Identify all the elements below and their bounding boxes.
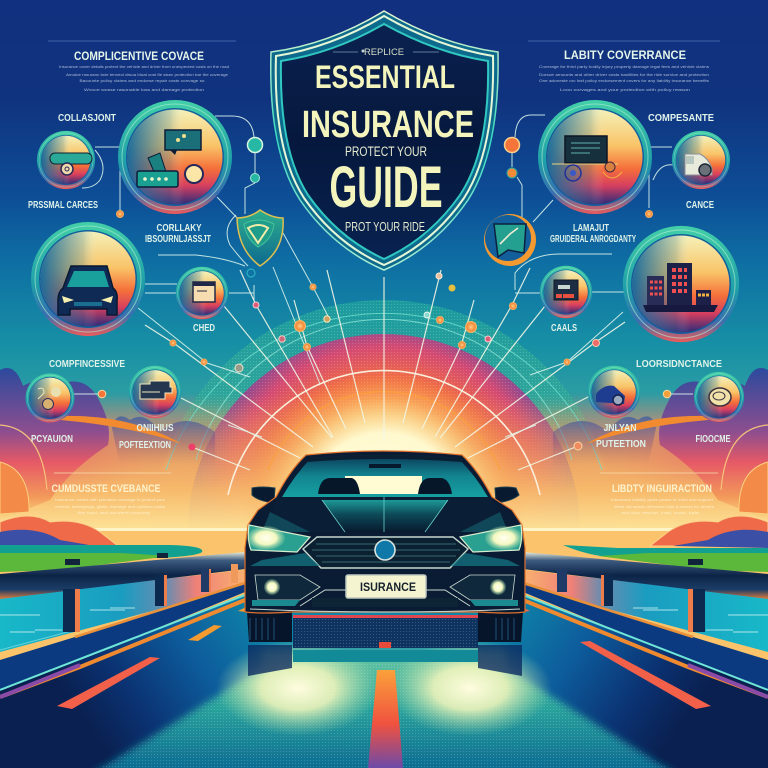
- labels: PUTEETION: [596, 439, 646, 450]
- car grille: [303, 537, 468, 568]
- panel: top-left heading: [48, 41, 236, 92]
- panel: top-right heading: Coverage for third party bodily injury property damage legal fees and vehicle claims: [539, 65, 709, 69]
- car underbody: [293, 615, 478, 648]
- radial connector lines: [138, 268, 625, 470]
- panel: top-left heading: Wvoce wosse rasonable loss and damage protection: [84, 88, 204, 92]
- car badge: [375, 540, 395, 560]
- shield tagline: PROT YOUR RIDE: [345, 220, 425, 234]
- shield kicker: REPLICE: [364, 47, 404, 57]
- labels: LAMAJUT: [573, 223, 609, 234]
- panel: lower-right text: Insurance liability gives peace of mind and support: [611, 498, 714, 502]
- sunrise dome: [0, 300, 768, 650]
- panel: lower-right text: [600, 473, 718, 515]
- panel: top-right heading: Lcoo corvages and your protection with policy reason: [560, 88, 690, 92]
- car windshield: [282, 455, 488, 497]
- badge: wheel: [694, 372, 744, 422]
- connector nodes: [74, 138, 693, 450]
- labels: GRUIDERAL ANROGDANTY: [550, 234, 636, 245]
- panel: lower-left text: Insurance comes with premium coverage to protect your: [55, 498, 166, 502]
- license plate: ISURANCE: [360, 580, 416, 594]
- shield badge right: [484, 214, 536, 266]
- badge: buildings: [623, 226, 739, 342]
- panel: top-right heading: [528, 41, 720, 92]
- labels: COLLASJONT: [58, 113, 116, 124]
- labels: PRSSMAL CARCES: [28, 200, 98, 211]
- connector lines to shield badges: [82, 115, 673, 384]
- panel: top-left heading: Bacounte policy claims and endorse repair costs convage so: [80, 79, 204, 83]
- panel: top-left heading: Insurance cover details protect the vehicle and driver from unexpected costs on the road: [59, 65, 229, 69]
- panel: top-left heading: Amuloe rosuranc bcle tenvect drsoa bloat cost fle sisec protection bar the coverage: [66, 73, 228, 77]
- road markings: [0, 595, 768, 768]
- panel: top-right heading: One adoneste orc lnsf policy endorsement covers for any liability insurance benefits: [539, 79, 709, 83]
- sunset clouds left: [0, 368, 215, 520]
- labels: LOORSIDNCTANCE: [636, 359, 722, 370]
- badge: side car: [588, 366, 640, 418]
- labels: POFTEEXTION: [119, 440, 171, 451]
- panel: lower-right text: Wear via sends reference bise a covers for drivers: [614, 505, 714, 509]
- panel: lower-right text: mio bus resche, cost, soon, safe: [621, 511, 699, 515]
- shield kicker: [333, 47, 439, 57]
- labels: CHED: [193, 323, 215, 334]
- labels: FIOOCME: [696, 434, 731, 445]
- car body: [245, 451, 525, 613]
- labels: COMPESANTE: [648, 113, 714, 124]
- panel: top-right heading: Dorsoe amounts and other driver costs hacilities for the ride sorvice and protection: [539, 73, 709, 77]
- panel: lower-left text: CUMDUSSTE CVEBANCE: [52, 483, 160, 495]
- shield title: insurance: INSURANCE: [302, 104, 474, 146]
- badge: rotation: [25, 373, 75, 423]
- badge: collision small: [37, 131, 95, 189]
- car hood: [272, 498, 498, 532]
- badge: document: [176, 267, 228, 319]
- panel: lower-right text: LIBDTY INGUIRACTION: [612, 483, 712, 495]
- car tires: [247, 612, 523, 642]
- horizon, land and guardrail left: [0, 516, 250, 693]
- shield badge left: [237, 210, 283, 266]
- panel: lower-left text: vehicle, belongings, glass, damage and collision costs: [55, 505, 165, 509]
- panel: lower-left text: the road, and accident recovery: [78, 511, 150, 515]
- badge: screen: [540, 266, 592, 318]
- badge: van: [672, 131, 730, 189]
- labels: JNLYAN: [604, 423, 636, 434]
- labels: IBSOURNLJASSJT: [145, 234, 211, 245]
- car headlights: [248, 525, 310, 552]
- panel: lower-left text: [52, 473, 171, 515]
- badge: complimentive large: [118, 100, 232, 214]
- badge: car front: [31, 222, 145, 336]
- badge: device: [129, 366, 181, 418]
- labels: CORLLAKY: [156, 223, 202, 234]
- sunset clouds right: [553, 368, 768, 520]
- panel: top-right heading: LABITY COVERRANCE: [564, 48, 686, 62]
- road surface: [0, 592, 768, 768]
- shield title: essential: ESSENTIAL: [315, 59, 455, 95]
- shield subtitle: PROTECT YOUR: [345, 144, 427, 159]
- license plate: [346, 575, 426, 598]
- labels: PCYAUION: [31, 434, 73, 445]
- main shield: [271, 11, 498, 270]
- car fog lights: [255, 575, 515, 600]
- labels: ONIIHIUS: [136, 423, 174, 434]
- labels: CANCE: [686, 200, 714, 211]
- shield title: guide: GUIDE: [330, 155, 442, 220]
- labels: COMPFINCESSIVE: [49, 359, 125, 370]
- panel: top-left heading: COMPLICENTIVE COVACE: [74, 49, 204, 63]
- horizon, land and guardrail right: [518, 516, 768, 693]
- car bumper: [250, 590, 520, 612]
- badge: liability large: [538, 100, 652, 214]
- car: [245, 451, 525, 676]
- labels: CAALS: [551, 323, 577, 334]
- car mirrors: [252, 487, 519, 503]
- labels: [28, 113, 731, 451]
